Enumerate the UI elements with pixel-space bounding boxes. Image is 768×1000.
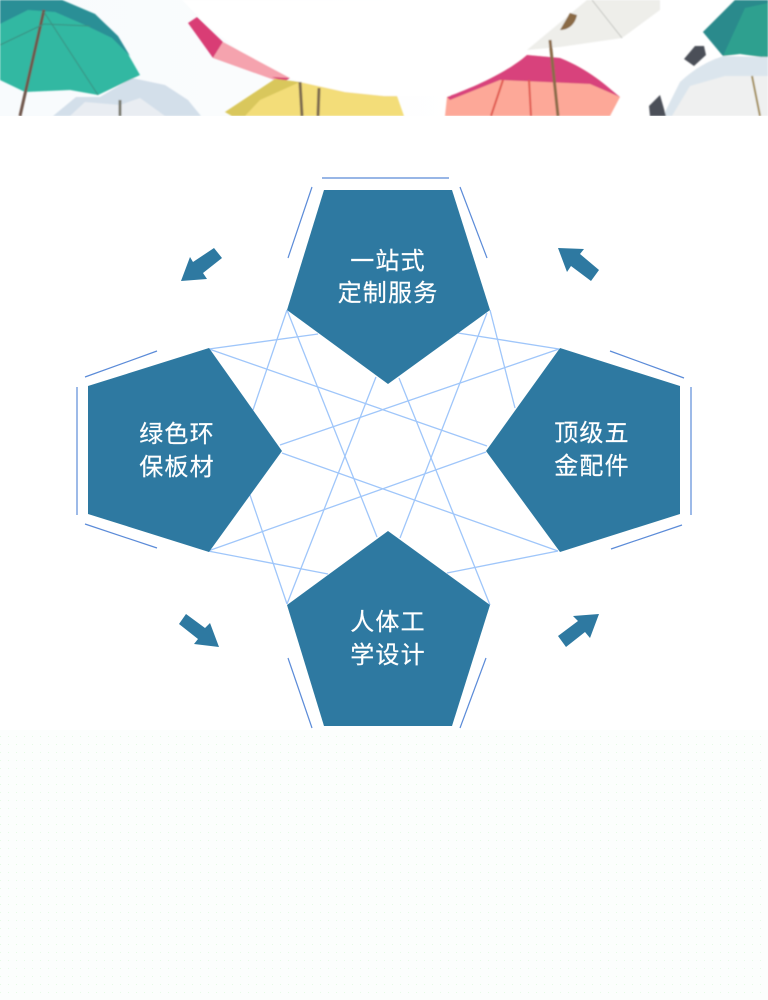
connecting lattice lines xyxy=(208,310,559,605)
label: top-grade hardware xyxy=(554,420,630,480)
panel: left pentagon, green board xyxy=(88,348,282,552)
umbrella: yellow xyxy=(225,79,404,116)
umbrella: teal left xyxy=(0,0,140,116)
panel: top pentagon, one-stop customisation xyxy=(287,190,490,384)
panel: right pentagon, top-grade hardware xyxy=(486,348,680,552)
label: green board xyxy=(139,421,215,481)
label: ergonomic design: 人体工 xyxy=(350,609,426,636)
umbrella: teal right xyxy=(703,0,768,58)
label: green board: 保板材 xyxy=(139,454,215,481)
panel: bottom pentagon, ergonomic design xyxy=(287,531,490,726)
label: ergonomic design xyxy=(350,609,426,669)
dotted pale footer background xyxy=(0,730,768,1000)
arrow: bottom right xyxy=(558,614,599,647)
arrow: top right xyxy=(558,248,599,281)
label: one-stop custom service: 一站式 xyxy=(350,248,426,275)
label: one-stop custom service: 定制服务 xyxy=(338,280,438,307)
label: top-grade hardware: 金配件 xyxy=(554,453,630,480)
umbrella: red and salmon xyxy=(445,40,620,116)
arrow: bottom left xyxy=(179,614,219,647)
umbrella: pink fragment xyxy=(188,17,290,82)
bracket lines around pentagons xyxy=(77,178,691,728)
umbrella: white top xyxy=(527,0,660,50)
arrow: top left xyxy=(181,248,222,281)
label: green board: 绿色环 xyxy=(139,421,215,448)
photo banner: umbrellas xyxy=(0,0,768,116)
white swoop xyxy=(197,16,451,98)
label: ergonomic design: 学设计 xyxy=(350,642,426,669)
label: top-grade hardware: 顶级五 xyxy=(554,420,630,447)
umbrella: pale blue left xyxy=(53,78,201,116)
umbrella: white right with lamps xyxy=(649,46,768,116)
label: one-stop custom service xyxy=(338,248,438,307)
